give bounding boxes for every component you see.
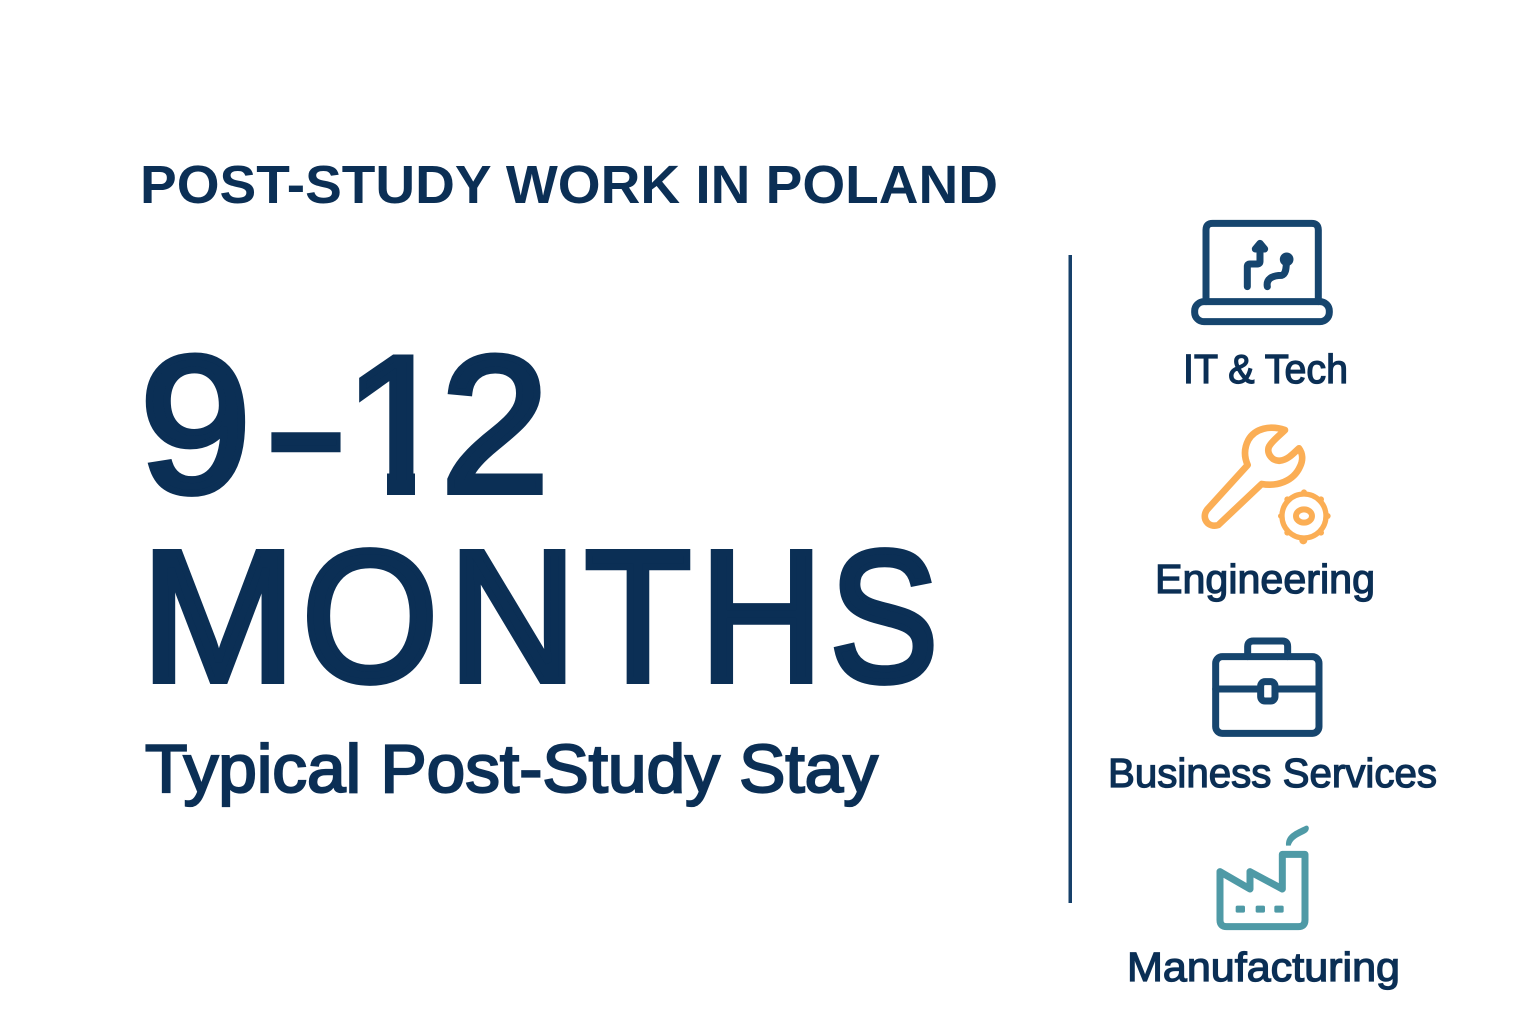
- label: Business Services: Business Services: [1108, 750, 1437, 796]
- big word: months: M: [141, 514, 296, 720]
- title: POST-STUDY WORK IN POLAND: [140, 155, 998, 215]
- big word: months: O: [302, 514, 438, 720]
- big word: months: T: [585, 514, 691, 720]
- big number: 9-12: [140, 316, 549, 534]
- big number: 9-12: 1: [344, 316, 452, 534]
- big word: months: S: [830, 514, 938, 720]
- icon: wrench and gear: [1205, 428, 1331, 544]
- icon: briefcase: [1216, 641, 1319, 733]
- label: Manufacturing: Manufacturing: [1127, 944, 1400, 990]
- big word: months: H: [700, 514, 823, 720]
- big word: months: N: [448, 514, 576, 720]
- icon: laptop: [1195, 223, 1329, 322]
- label: Engineering: Engineering: [1155, 556, 1375, 602]
- icon: factory: [1220, 826, 1309, 927]
- big number: 9-12: 9: [140, 316, 251, 534]
- label: IT & Tech: IT & Tech: [1183, 346, 1348, 392]
- subtitle: Typical Post-Study Stay: [145, 731, 878, 807]
- big word: months: [141, 514, 938, 720]
- big number: 9-12: 2: [441, 316, 549, 534]
- big number: 9-12: –: [274, 316, 339, 534]
